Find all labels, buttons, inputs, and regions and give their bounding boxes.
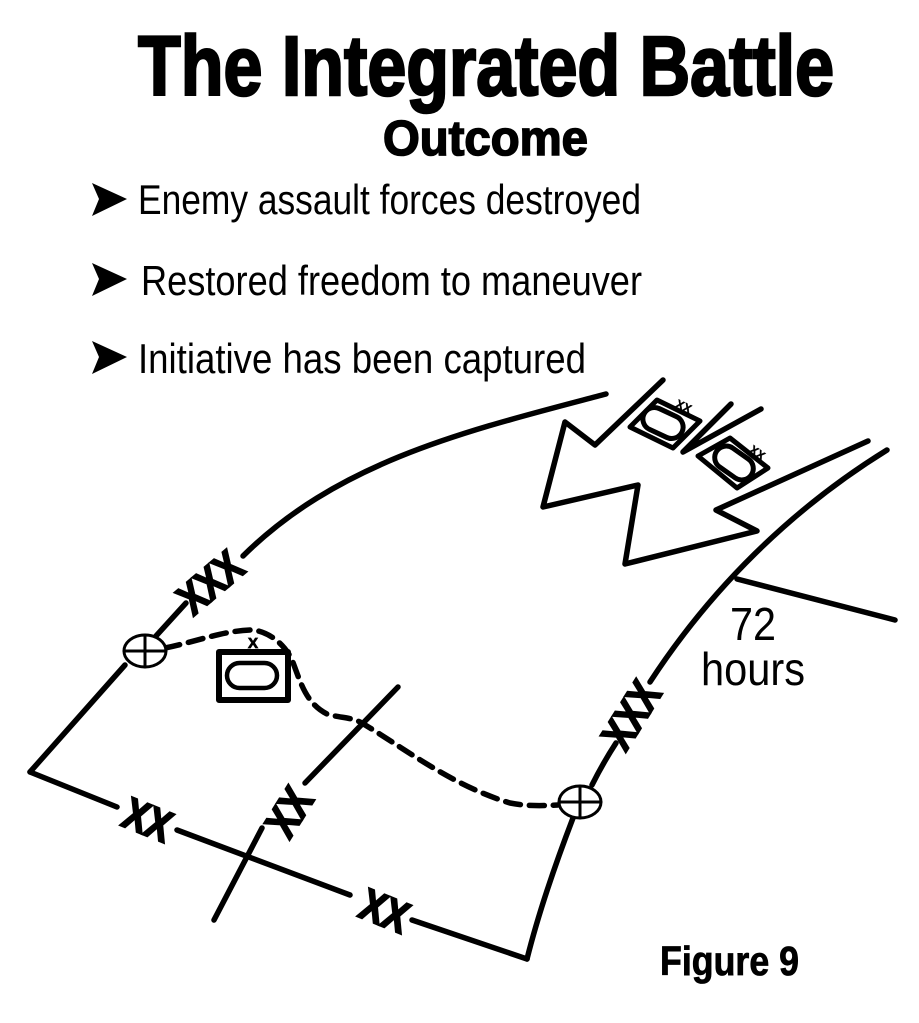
bullet text 1: Enemy assault forces destroyed bbox=[138, 176, 641, 223]
echelon labels bbox=[116, 397, 768, 943]
icon: bullet arrow 1 bbox=[92, 183, 127, 216]
phase point left bbox=[124, 635, 166, 667]
right boundary line bbox=[527, 450, 887, 959]
label: xx on enemy unit 2: XX bbox=[747, 442, 768, 463]
label: XXX right: XXX bbox=[592, 673, 671, 758]
divisional boundary line bbox=[214, 687, 398, 920]
subtitle: outcome: Outcome bbox=[383, 112, 588, 166]
enemy axis lines bbox=[683, 404, 761, 452]
dashed maneuver route bbox=[165, 630, 558, 806]
left boundary line bbox=[30, 394, 606, 772]
icon: bullet arrow 3 bbox=[92, 341, 127, 374]
72 hours label bbox=[701, 598, 805, 695]
enemy unit symbol 1 bbox=[630, 400, 700, 448]
label: x on friendly unit: X bbox=[248, 635, 258, 652]
outcome list bbox=[92, 176, 642, 382]
phase point right bbox=[559, 786, 601, 818]
bullet text 2: Restored freedom to maneuver bbox=[141, 257, 642, 304]
figure label: Figure 9 bbox=[660, 938, 799, 984]
enemy unit symbol 2 bbox=[698, 438, 768, 488]
battlefield map bbox=[30, 380, 895, 959]
label: xx on enemy unit 1: XX bbox=[673, 397, 694, 416]
enemy attack arrow bbox=[543, 380, 868, 564]
bullet text 3: Initiative has been captured bbox=[138, 335, 586, 382]
icon: bullet arrow 2 bbox=[92, 263, 127, 296]
label: XX centre: XX bbox=[256, 779, 323, 846]
label: XXX left: XXX bbox=[168, 542, 253, 624]
label: XX bottom left: XX bbox=[116, 789, 179, 852]
text: hours: hours bbox=[701, 643, 805, 695]
label: XX bottom right: XX bbox=[353, 880, 416, 943]
text: 72: 72 bbox=[730, 598, 776, 650]
friendly unit symbol bbox=[219, 652, 288, 700]
bottom boundary line bbox=[30, 772, 527, 959]
72 hours line bbox=[737, 579, 895, 620]
